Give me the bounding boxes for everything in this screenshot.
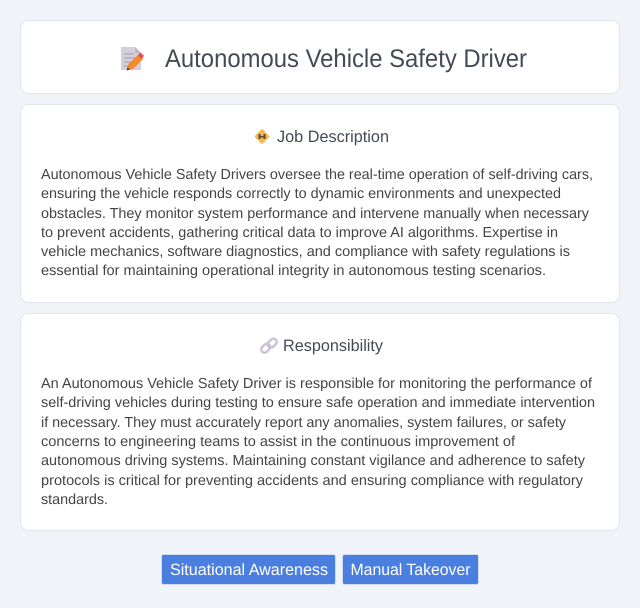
responsibility text — [41, 376, 595, 508]
responsibility text: standards. — [41, 492, 108, 508]
icon: road sign — [254, 129, 270, 144]
responsibility text: if necessary. They must accurately report any anomalies, system failures, or safety — [41, 415, 567, 431]
job description text: to prevent accidents, gathering critical data to improve AI algorithms. Expertise in — [41, 225, 558, 241]
responsibility text: autonomous driving systems. Maintaining constant vigilance and adherence to safety — [41, 453, 586, 469]
heading: responsibility: Responsibility — [283, 337, 384, 355]
panel: responsibility — [20, 314, 620, 530]
panel: title — [20, 20, 620, 94]
icon: document with pencil — [121, 47, 144, 70]
responsibility text: protocols is critical for preventing accidents and ensuring compliance with regulatory — [41, 473, 584, 489]
icon: chain link — [260, 337, 278, 354]
job description text: Autonomous Vehicle Safety Drivers oversee the real-time operation of self-driving cars, — [41, 167, 593, 183]
job description text: essential for maintaining operational integrity in autonomous testing scenarios. — [41, 263, 546, 279]
tag: situational awareness: Situational Awareness — [170, 561, 328, 579]
job description text: obstacles. They monitor system performance and intervene manually when necessary — [41, 206, 590, 222]
tag: manual takeover — [342, 554, 478, 584]
panel: job description — [20, 104, 620, 302]
tag: manual takeover: Manual Takeover — [350, 561, 471, 579]
responsibility text: An Autonomous Vehicle Safety Driver is responsible for monitoring the performance of — [41, 376, 593, 392]
job description text: ensuring the vehicle responds correctly to dynamic environments and unexpected — [41, 186, 561, 202]
job description text — [41, 167, 593, 279]
heading: job description: Job Description — [277, 128, 389, 146]
job description text: vehicle mechanics, software diagnostics, and compliance with safety regulations is — [41, 244, 570, 260]
responsibility text: concerns to engineering teams to assist in the continuous improvement of — [41, 434, 516, 450]
title text: Autonomous Vehicle Safety Driver — [165, 45, 527, 73]
responsibility text: self-driving vehicles during testing to ensure safe operation and immediate intervention — [41, 395, 595, 411]
tag: situational awareness — [162, 554, 336, 584]
